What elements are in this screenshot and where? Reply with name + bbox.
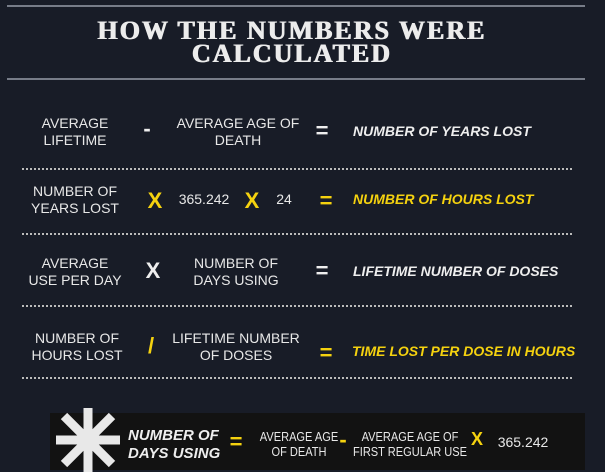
result: years lost: NUMBER OF YEARS LOST	[353, 123, 531, 139]
text: average use per day	[28, 255, 122, 288]
text: number of years lost: YEARS LOST	[31, 200, 119, 216]
title	[97, 16, 486, 68]
title: HOW THE NUMBERS WERE	[97, 16, 486, 45]
result: number of days using	[128, 427, 220, 462]
text: average lifetime	[42, 115, 108, 148]
text: number of days using: DAYS USING	[193, 272, 279, 288]
row 3	[28, 255, 558, 288]
text: average age of death	[176, 115, 299, 148]
text: number of days using: NUMBER OF	[194, 255, 278, 271]
text: average age of death: DEATH	[215, 132, 261, 148]
bottom panel	[50, 413, 585, 470]
text: average lifetime: AVERAGE	[42, 115, 108, 131]
text: lifetime number of doses: LIFETIME NUMBER	[172, 330, 300, 346]
result: time lost per dose: TIME LOST PER DOSE IN HOURS	[352, 343, 575, 359]
text: number of years lost	[31, 183, 119, 216]
text: average use per day: USE PER DAY	[28, 272, 122, 288]
operator x: X	[471, 429, 483, 449]
result: lifetime doses: LIFETIME NUMBER OF DOSES	[353, 263, 558, 279]
title: CALCULATED	[191, 39, 392, 68]
text: 365.242: 365.242	[498, 434, 548, 450]
text: average lifetime: LIFETIME	[43, 132, 106, 148]
operator minus: -	[339, 427, 347, 452]
text: number of hours lost: HOURS LOST	[31, 347, 123, 363]
result: number of days using: DAYS USING	[128, 445, 220, 462]
operator x: X	[148, 188, 162, 213]
operator equals: =	[320, 188, 332, 213]
operator equals: =	[316, 258, 328, 283]
icon: asterisk	[56, 408, 120, 472]
operator equals: =	[320, 340, 332, 365]
operator equals: =	[230, 429, 242, 454]
row 1	[42, 115, 532, 148]
text: average age of death: OF DEATH	[271, 444, 327, 459]
operator equals: =	[316, 118, 328, 143]
text: first regular use: AVERAGE AGE OF	[362, 429, 458, 444]
text: lifetime number of doses	[172, 330, 300, 363]
text: average age of death	[260, 429, 338, 459]
operator x: X	[146, 258, 160, 283]
row 2	[31, 183, 534, 216]
text: number of years lost: NUMBER OF	[33, 183, 117, 199]
row 4	[31, 330, 575, 365]
text: 365.242: 365.242	[179, 191, 229, 207]
text: first regular use: FIRST REGULAR USE	[353, 444, 467, 459]
text: average age of death: AVERAGE AGE OF	[177, 115, 299, 131]
operator divide: /	[148, 333, 154, 358]
text: 24: 24	[276, 191, 292, 207]
result: hours lost: NUMBER OF HOURS LOST	[353, 191, 533, 207]
text: number of days using	[193, 255, 279, 288]
operator x: X	[245, 188, 259, 213]
result: number of days using: NUMBER OF	[128, 427, 219, 444]
text: first regular use	[353, 429, 467, 459]
text: average use per day: AVERAGE	[42, 255, 108, 271]
text: average age of death: AVERAGE AGE	[260, 429, 338, 444]
operator minus: -	[143, 116, 151, 141]
text: number of hours lost	[31, 330, 123, 363]
text: lifetime number of doses: OF DOSES	[200, 347, 272, 363]
text: number of hours lost: NUMBER OF	[35, 330, 119, 346]
